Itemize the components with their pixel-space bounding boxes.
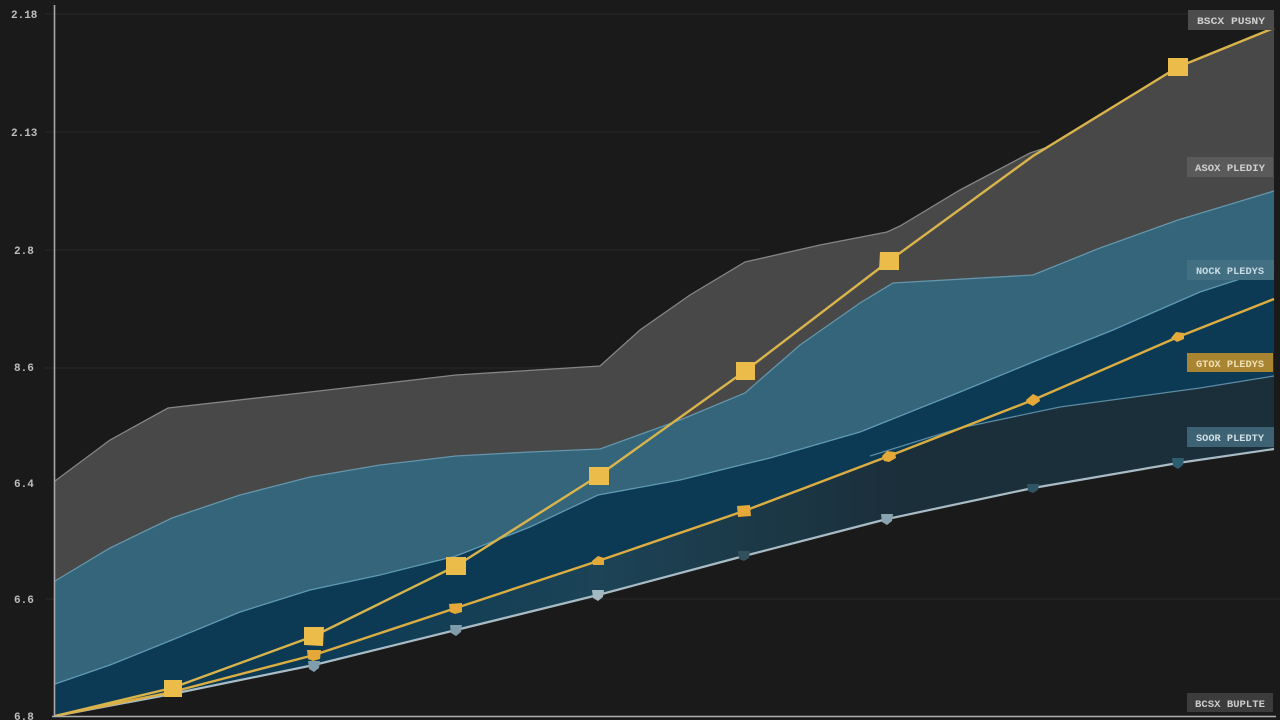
series label: light blue [1187,260,1274,280]
series label: teal [1187,427,1274,447]
series label: yellow [1187,353,1273,372]
series label: bottom: BCSX BUPLTE [1195,700,1265,711]
x axis [52,716,1276,718]
y axis labels: 6.4 [14,479,34,491]
y axis labels [11,10,38,720]
series label: bottom [1187,693,1273,712]
y axis labels: 6.6 [14,595,34,607]
y axis [54,5,56,717]
area: dark blue band [55,268,1274,716]
series label: gray [1187,157,1273,177]
series label: teal: SOOR PLEDTY [1196,434,1264,445]
area: dark teal band [172,376,1274,694]
series label: top gray [1188,10,1274,30]
y axis labels: 2.8 [14,246,34,258]
area: light blue band [55,191,1274,716]
y axis labels: 2.18 [11,10,38,22]
line: lower yellow series with small markers [55,299,1274,716]
series label: yellow: GTOX PLEDYS [1196,360,1264,371]
line: baseline series with markers [55,449,1274,716]
series label: top gray: BSCX PUSNY [1197,17,1265,28]
series label: light blue: NOCK PLEDYS [1196,267,1264,278]
series label: gray: ASOX PLEDIY [1195,164,1265,175]
y axis labels: 2.13 [11,128,38,140]
y axis labels: 8.6 [14,363,34,375]
